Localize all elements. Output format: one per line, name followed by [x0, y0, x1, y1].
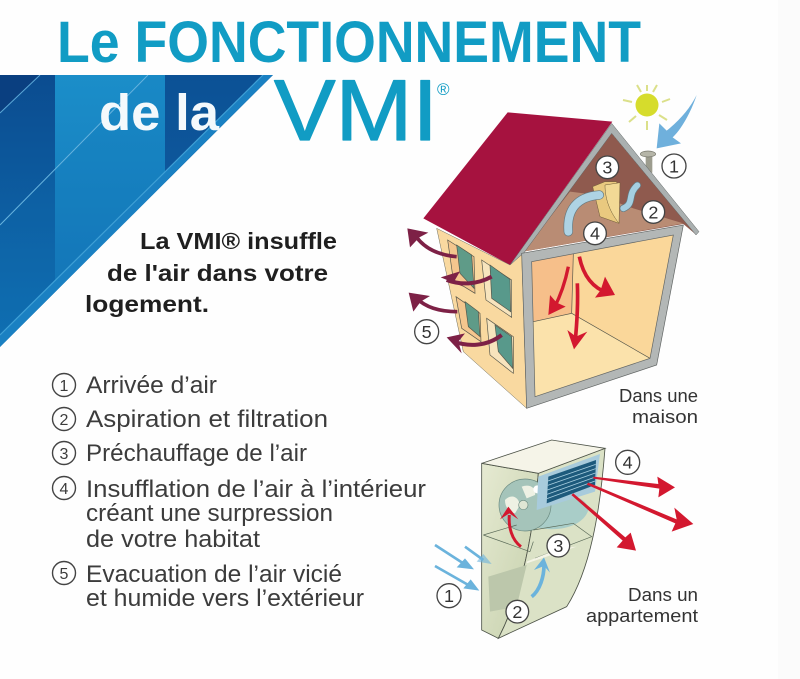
number 3: 3: [553, 536, 563, 556]
number 5: 5: [422, 322, 432, 342]
roof: [423, 112, 612, 265]
left duct: [568, 195, 599, 232]
blue air intake arrow: [657, 95, 697, 148]
purple exhaust arrow 1: [407, 228, 457, 257]
blue intake arrows: [435, 545, 492, 591]
title: Le FONCTIONNEMENT: [57, 10, 641, 75]
legend item 3: 3: [60, 446, 69, 463]
title: ®: [437, 80, 450, 99]
house illustration: [407, 95, 699, 408]
number 1: [662, 154, 686, 178]
caption: house: maison: [632, 407, 698, 427]
intro text: logement.: [85, 291, 209, 317]
red air arrow down: [567, 283, 587, 349]
fan: [499, 479, 551, 531]
purple exhaust arrow 3: [409, 293, 457, 312]
blue internal arrow: [532, 557, 550, 597]
preheating box: [593, 182, 620, 223]
number 3: [596, 156, 619, 179]
number 4: [584, 222, 606, 245]
number 2: 2: [648, 202, 658, 222]
legend item 4: Insufflation de l’air à l’intérieur: [86, 476, 426, 503]
legend item 2: Aspiration et filtration: [86, 406, 328, 433]
number 2: [506, 600, 529, 623]
number 2: 2: [512, 602, 522, 622]
unit front face: [498, 448, 605, 638]
number 4: [616, 450, 640, 474]
number 1: 1: [669, 156, 679, 176]
caption: house: Dans une: [619, 386, 698, 406]
red exhaust arrow top: [593, 477, 675, 497]
intro text: [85, 228, 337, 317]
apartment unit illustration: [435, 440, 693, 638]
legend list: [52, 372, 426, 612]
purple exhaust arrow 4: [447, 333, 502, 353]
legend item 1: Arrivée d’air: [86, 372, 217, 399]
legend item 1: 1: [60, 378, 69, 395]
red exhaust arrow bottom: [571, 493, 636, 551]
panel: blue diagonal banner: [0, 75, 273, 347]
grille: [547, 460, 596, 503]
red exhaust arrow middle: [587, 483, 693, 532]
heat exchanger: [488, 565, 527, 612]
caption: apartment: appartement: [586, 606, 698, 626]
caption: apartment: [586, 585, 698, 626]
red air arrow left: [548, 267, 568, 315]
legend item 4: de votre habitat: [86, 526, 260, 553]
legend item 4: [52, 476, 426, 553]
legend item 5: [52, 561, 364, 612]
unit top: [482, 440, 605, 473]
open interior: [532, 235, 673, 397]
intro text: de l'air dans votre: [107, 260, 328, 286]
red internal arrow: [500, 507, 521, 547]
caption: apartment: Dans un: [628, 585, 698, 605]
blower housing: [533, 496, 588, 529]
title: [57, 10, 641, 159]
caption: house: [619, 386, 698, 427]
unit shelf lines: [483, 523, 592, 558]
number 4: 4: [590, 224, 600, 244]
grille panel: [537, 454, 600, 510]
number 1: 1: [444, 586, 454, 606]
interior frame: [522, 225, 683, 408]
windows: [448, 240, 513, 373]
attic insulation: [523, 192, 683, 252]
legend item 5: Evacuation de l’air vicié: [86, 561, 342, 588]
number 1: [437, 584, 461, 608]
unit left side: [482, 463, 538, 638]
page edge shading: [778, 0, 800, 679]
legend item 3: Préchauffage de l’air: [86, 440, 307, 467]
title: VMI: [274, 63, 438, 159]
legend item 2: 2: [60, 412, 69, 429]
number 5: [415, 320, 439, 344]
intro text: La VMI® insuffle: [140, 228, 337, 254]
legend item 4: créant une surpression: [86, 500, 333, 527]
legend item 4: 4: [60, 481, 69, 498]
number 4: 4: [623, 453, 633, 473]
number 3: 3: [602, 158, 612, 178]
legend item 5: 5: [60, 566, 69, 583]
icon: sun: [623, 85, 670, 130]
legend item 5: et humide vers l’extérieur: [86, 585, 364, 612]
left house wall: [437, 228, 527, 408]
title: de la: [99, 84, 220, 141]
right duct: [623, 185, 637, 208]
red air arrow right: [579, 257, 615, 298]
light shelf: [527, 547, 577, 563]
number 3: [547, 534, 570, 557]
number 2: [642, 201, 665, 223]
chimney vent: [640, 151, 656, 173]
gable edge: [510, 123, 699, 265]
purple exhaust arrow 2: [441, 271, 492, 287]
attic: [523, 133, 696, 252]
